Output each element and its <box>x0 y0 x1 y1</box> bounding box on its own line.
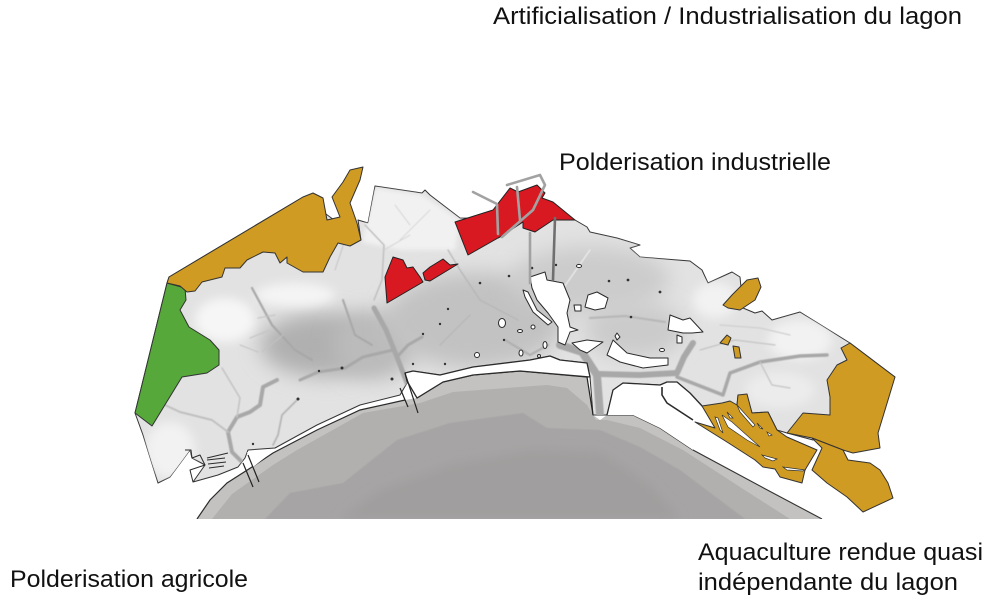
sea <box>197 371 822 519</box>
map: lagoon and sea <box>135 167 895 519</box>
fingers polder <box>695 394 817 483</box>
panel: industrial polders (red) <box>385 185 575 303</box>
label: aquaculture: indépendante du lagon <box>698 569 958 596</box>
fingers polder openings <box>715 405 805 471</box>
beach spits <box>185 356 703 482</box>
lagoon depth shading <box>145 188 832 478</box>
river mouth channels <box>243 373 593 487</box>
heading: Artificialisation: Artificialisation / Industrialisation du lagon <box>493 3 962 30</box>
tidal channels <box>165 205 827 487</box>
panel: aquaculture east (ochre) <box>695 278 895 512</box>
lagoon land base <box>135 186 895 483</box>
panel: aquaculture north-west (ochre) <box>167 167 363 292</box>
island <box>723 278 761 310</box>
label: aquaculture: Aquaculture rendue quasi <box>698 539 983 566</box>
white reclaimed islands <box>474 264 703 368</box>
label: industrial polder: Polderisation industrielle <box>559 149 831 176</box>
panel: agricultural polder (green) <box>135 283 219 426</box>
label: aquaculture <box>698 539 983 596</box>
large east polder <box>787 343 895 453</box>
harbour jetties <box>473 175 555 283</box>
label: agricultural polder: Polderisation agricole <box>10 566 248 593</box>
south-east polder <box>812 438 893 512</box>
tide gauge dots <box>252 264 661 445</box>
